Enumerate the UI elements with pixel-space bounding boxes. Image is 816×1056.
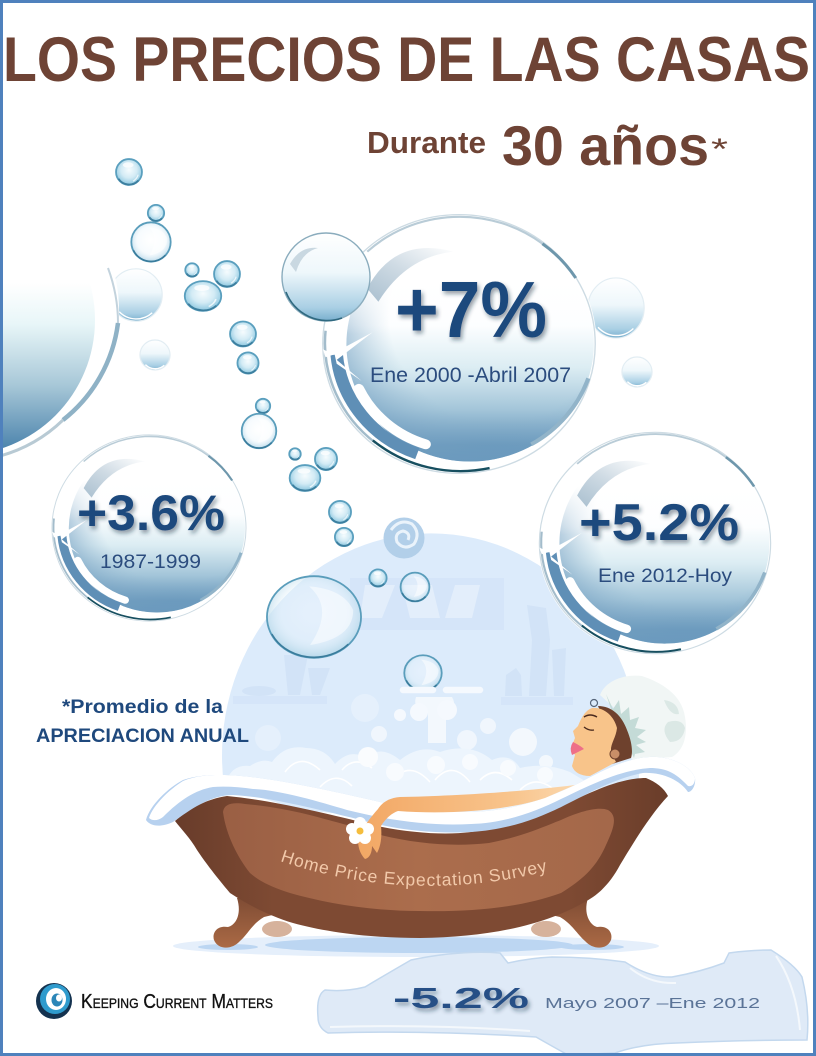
bubble panel: +3.6%	[51, 434, 247, 622]
value: +7%	[395, 265, 547, 354]
value: -5.2%	[393, 983, 529, 1015]
overlapping bubble	[282, 233, 370, 321]
ear	[610, 749, 620, 759]
subtitle: durante 30 años: *	[711, 133, 728, 166]
bubble panel: +7%	[282, 213, 597, 475]
bubble panel: +5.2%	[538, 431, 772, 655]
date range: Ene 2000 -Abril 2007	[370, 364, 571, 387]
tub legs	[262, 921, 561, 937]
bubble: large near tub	[267, 576, 361, 658]
tub feet	[214, 895, 611, 948]
tub rim	[146, 757, 695, 832]
face	[571, 708, 617, 776]
value: +5.2%	[579, 494, 739, 552]
arm	[358, 785, 575, 859]
tub inner panel	[223, 803, 614, 911]
value: +3.6%	[77, 485, 225, 541]
date range: Mayo 2007 –Ene 2012	[545, 995, 760, 1012]
woman head	[571, 676, 686, 776]
date range: 1987-1999	[100, 552, 201, 573]
footnote: APRECIACION ANUAL	[36, 726, 249, 747]
flower	[346, 817, 374, 844]
logo text: Keeping Current Matters	[81, 991, 273, 1013]
water puddle	[318, 950, 808, 1055]
eye and brow	[584, 715, 597, 730]
small rising bubbles	[116, 159, 429, 601]
lips	[571, 742, 584, 755]
background bathroom circle	[222, 533, 640, 830]
floor shadows	[173, 935, 659, 957]
tub label: Home Price Expectation Survey	[281, 850, 546, 889]
bubble: large cut off left	[0, 163, 119, 457]
subtitle: durante 30 años: 30 años	[502, 114, 709, 177]
shower cap	[600, 676, 686, 760]
illustration: woman in bathtub	[146, 676, 696, 957]
date range: Ene 2012-Hoy	[598, 566, 733, 587]
logo mark	[36, 983, 72, 1019]
pale bubbles behind	[110, 269, 652, 387]
subtitle: durante 30 años: Durante	[367, 125, 486, 160]
subtitle: durante 30 años	[367, 114, 728, 177]
curl	[590, 700, 598, 706]
hair	[598, 706, 632, 764]
faucet and foam	[226, 690, 600, 815]
logo: keeping current matters	[36, 983, 273, 1019]
bubble: swirl	[384, 518, 424, 558]
bubble: near faucet	[404, 655, 442, 691]
footnote: *Promedio de la	[62, 697, 223, 718]
tub body	[175, 778, 668, 938]
footnote	[36, 697, 249, 747]
